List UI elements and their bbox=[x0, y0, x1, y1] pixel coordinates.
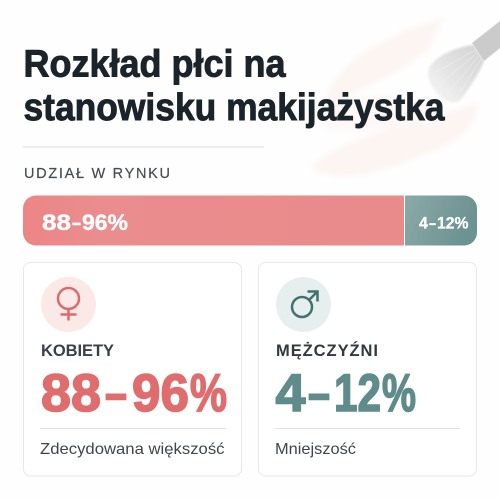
decorative blush strokes bbox=[310, 17, 478, 176]
value: women: 96 bbox=[132, 364, 189, 423]
bar segment: men bbox=[405, 196, 477, 246]
bar segment: women bbox=[23, 196, 404, 246]
value: men: – bbox=[308, 364, 330, 423]
brush head bbox=[428, 45, 484, 102]
market share stacked bar bbox=[23, 196, 477, 246]
panel: men bbox=[258, 262, 476, 476]
bar label: women: – bbox=[72, 210, 81, 235]
bar label: men: – bbox=[429, 214, 436, 232]
description: women: Zdecydowana większość bbox=[40, 441, 225, 458]
title: stanowisku makijażystka bbox=[24, 87, 445, 129]
icon: female symbol bbox=[41, 277, 96, 332]
bar label: men: 12% bbox=[437, 214, 469, 232]
value: women: % bbox=[190, 364, 227, 423]
value: men: 4 bbox=[276, 364, 306, 423]
makeup brush illustration bbox=[428, 21, 500, 102]
label: men: MĘŻCZYŹNI bbox=[276, 341, 378, 360]
bar label: women: 88 bbox=[42, 210, 71, 235]
value: men: 12 bbox=[334, 364, 381, 423]
description: men: Mniejszość bbox=[275, 441, 356, 458]
icon: male symbol bbox=[276, 277, 331, 332]
label: women: KOBIETY bbox=[41, 342, 114, 360]
value: women: – bbox=[105, 364, 127, 423]
title: Rozkład płci na bbox=[24, 44, 286, 86]
bar label: women: 96% bbox=[82, 210, 128, 235]
value: men: % bbox=[382, 364, 416, 423]
title bbox=[24, 44, 445, 129]
value: women: 88 bbox=[41, 364, 101, 423]
bar label: men: 4 bbox=[419, 214, 429, 232]
section label: market share: UDZIAŁ W RYNKU bbox=[24, 166, 170, 182]
panel: women bbox=[24, 262, 242, 476]
brush handle bbox=[472, 21, 500, 61]
